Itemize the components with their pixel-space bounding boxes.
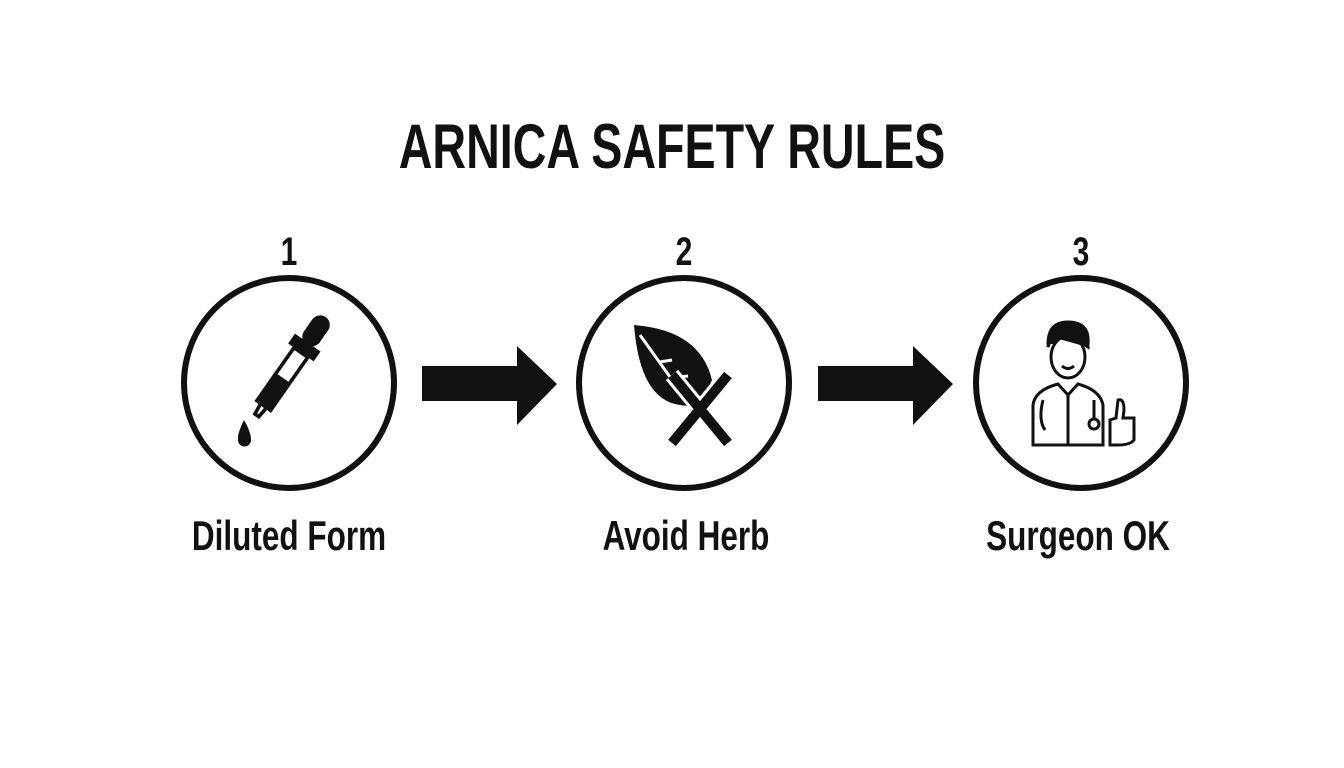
label 2: Avoid Herb [603,512,769,559]
step number 1: 1 [281,230,297,274]
label 3: Surgeon OK [986,512,1170,559]
icon: cross [672,375,728,443]
step number 3: 3 [1073,230,1089,274]
step number 2: 2 [676,230,692,274]
icon: dropper [244,308,338,424]
title: ARNICA SAFETY RULES [399,112,945,182]
step 1 circle: dropper [184,278,394,488]
arrow 2 [818,346,953,425]
icon: doctor [1033,322,1134,445]
label 1: Diluted Form [192,512,386,559]
icon: leaf [634,325,712,406]
step 3 circle: surgeon [976,278,1186,488]
arrow 1 [422,346,557,425]
step 2 circle: avoid herb [579,278,789,488]
